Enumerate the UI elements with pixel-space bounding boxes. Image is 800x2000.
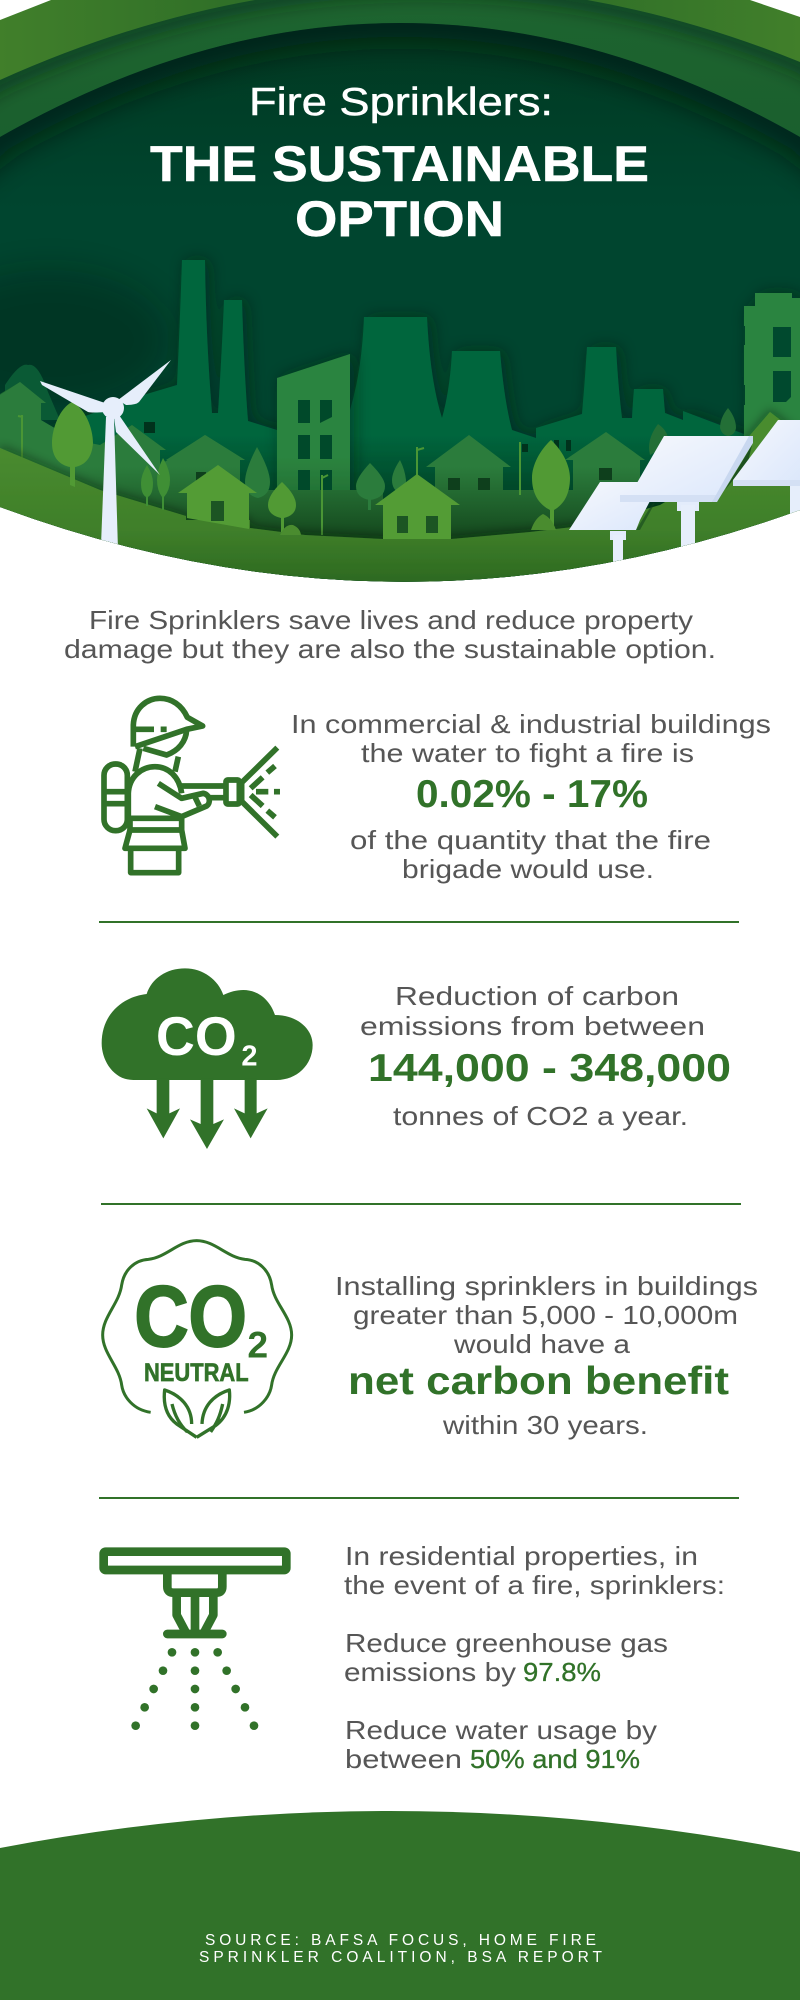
panel: water use	[104, 698, 771, 884]
intro text: damage but they are also the sustainable option.	[64, 634, 716, 664]
panel: carbon reduction	[102, 968, 731, 1149]
icon: firefighter with hose	[104, 698, 280, 873]
panel: net carbon benefit	[103, 1241, 758, 1440]
carbon stat text: 144,000 - 348,000	[368, 1047, 731, 1090]
residential text: Reduce greenhouse gas	[345, 1628, 668, 1658]
residential text: emissions by	[344, 1657, 516, 1687]
residential text: 97.8%	[523, 1657, 601, 1687]
mid ground with houses	[0, 382, 645, 545]
apartment building left	[277, 354, 350, 520]
carbon stat text	[360, 981, 731, 1131]
water stat text	[291, 709, 771, 884]
water stat text: 0.02% - 17%	[416, 773, 648, 816]
intro text	[64, 605, 716, 664]
back left house	[0, 364, 58, 420]
title	[150, 81, 649, 247]
icon: CO2 cloud with arrows	[102, 968, 313, 1149]
residential text: the event of a fire, sprinklers:	[344, 1570, 725, 1600]
icon: CO2 neutral badge: 2	[247, 1323, 268, 1365]
source text: SOURCE: BAFSA FOCUS, HOME FIRE	[205, 1932, 596, 1949]
icon: CO2 cloud with arrows: 2	[241, 1041, 257, 1073]
net benefit text: within 30 years.	[442, 1410, 648, 1440]
water stat text: of the quantity that the fire	[350, 825, 711, 855]
icon: sprinkler head	[104, 1552, 286, 1730]
residential text: 50% and 91%	[470, 1744, 640, 1774]
foreground hill	[0, 412, 800, 600]
residential text	[344, 1541, 725, 1774]
water stat text: In commercial & industrial buildings	[291, 709, 771, 739]
source text	[199, 1932, 603, 1966]
solar panels	[569, 420, 800, 575]
wind turbine	[40, 360, 171, 550]
hero illustration	[0, 0, 800, 600]
icon: CO2 neutral badge	[103, 1241, 292, 1437]
icon: CO2 neutral badge: NEUTRAL	[144, 1359, 249, 1387]
net benefit text: net carbon benefit	[348, 1360, 729, 1403]
panel: residential properties	[104, 1541, 725, 1774]
residential text: In residential properties, in	[345, 1541, 698, 1571]
residential text: Reduce water usage by	[345, 1715, 657, 1745]
title: Fire Sprinklers:	[249, 81, 553, 124]
source text: SPRINKLER COALITION, BSA REPORT	[199, 1949, 603, 1966]
net benefit text: Installing sprinklers in buildings	[335, 1271, 758, 1301]
net benefit text	[335, 1271, 758, 1440]
title: OPTION	[295, 191, 504, 247]
net benefit text: would have a	[453, 1329, 631, 1359]
title: THE SUSTAINABLE	[150, 136, 649, 192]
footer band	[0, 1811, 800, 2000]
factory skyline	[20, 260, 760, 600]
carbon stat text: emissions from between	[360, 1011, 705, 1041]
intro text: Fire Sprinklers save lives and reduce property	[89, 605, 693, 635]
tower building right	[744, 293, 800, 520]
water stat text: the water to fight a fire is	[361, 738, 694, 768]
carbon stat text: tonnes of CO2 a year.	[393, 1101, 688, 1131]
carbon stat text: Reduction of carbon	[395, 981, 679, 1011]
icon: CO2 cloud with arrows: CO	[156, 1005, 237, 1067]
mid green trees and lamps	[18, 408, 736, 535]
residential text: between	[345, 1744, 462, 1774]
water stat text: brigade would use.	[402, 854, 654, 884]
icon: CO2 neutral badge: CO	[134, 1269, 247, 1365]
foreground houses and trees	[52, 402, 570, 539]
net benefit text: greater than 5,000 - 10,000m	[353, 1300, 738, 1330]
